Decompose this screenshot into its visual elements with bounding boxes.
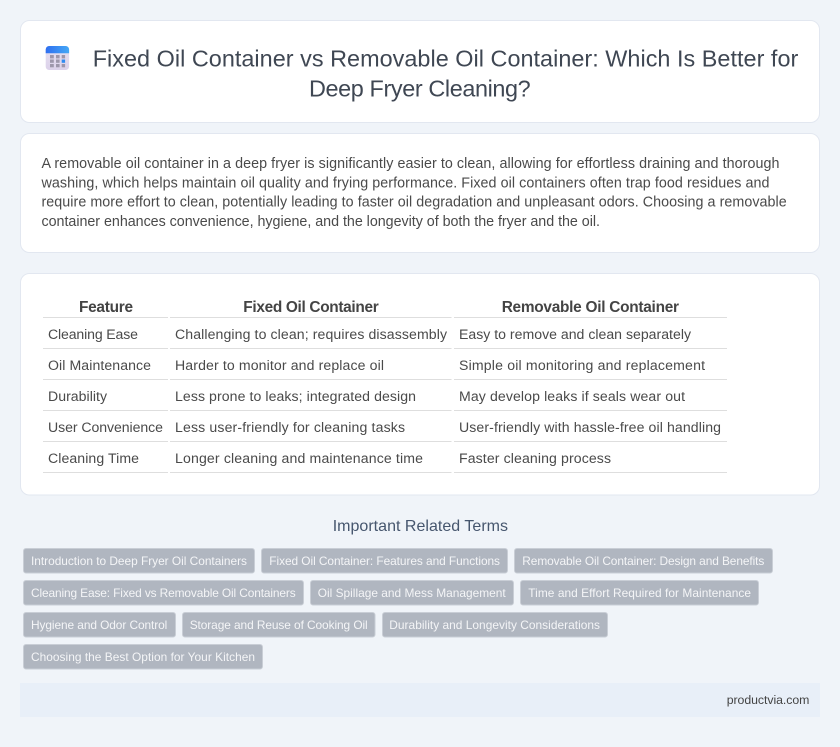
row: cleaning time: Cleaning Time [48,450,139,466]
summary text [40,156,787,230]
tag: choosing [24,644,262,669]
tag: durability: Durability and Longevity Considerations [389,618,600,632]
summary text: A removable oil container in a deep fryer is significantly easier to clean, allowing for effortless draining and thorough [42,156,780,172]
tag: introduction [24,548,254,573]
tag: durability [382,612,608,637]
panel: summary card [20,134,820,252]
row: durability: May develop leaks if seals wear out [459,388,685,404]
row: oil maintenance: Oil Maintenance [48,357,151,373]
summary text: require more effort to clean, potentially leading to faster oil degradation and unpleasant odors. Choosing a removable [42,195,787,211]
tag: introduction: Introduction to Deep Fryer Oil Containers [31,554,247,568]
tag: removable container: Removable Oil Container: Design and Benefits [522,554,764,568]
tag: storage [182,612,375,637]
table header: Fixed Oil Container [243,299,379,316]
tag: removable container [514,548,772,573]
tag: cleaning ease: Cleaning Ease: Fixed vs Removable Oil Containers [31,586,296,600]
panel: title card [20,20,820,122]
tag: time and effort [520,580,758,605]
title: Fixed Oil Container vs Removable Oil Container: Which Is Better for [93,46,799,72]
row: cleaning ease [48,326,692,342]
tag: cleaning ease [24,580,304,605]
footer bar [20,683,820,717]
row: user convenience: User Convenience [48,419,163,435]
table header [79,299,679,316]
row: oil maintenance: Simple oil monitoring and replacement [459,357,705,373]
row: durability [48,388,685,404]
row: durability: Less prone to leaks; integrated design [175,388,416,404]
row: user convenience: User-friendly with hassle-free oil handling [459,419,721,435]
tag: oil spillage [310,580,514,605]
table header: Removable Oil Container [502,299,679,316]
tag: time and effort: Time and Effort Required for Maintenance [528,586,751,600]
row: user convenience [48,419,721,435]
tag: fixed container [262,548,508,573]
panel: related term tags [24,548,772,669]
row: durability: Durability [48,388,108,404]
footer text: site name: productvia.com [727,693,809,707]
row: cleaning ease: Challenging to clean; requires disassembly [175,326,448,342]
row: oil maintenance [48,357,705,373]
title [93,46,799,102]
row: oil maintenance: Harder to monitor and replace oil [175,357,384,373]
row: cleaning time: Faster cleaning process [459,450,611,466]
title: Deep Fryer Cleaning? [309,76,531,102]
tag: oil spillage: Oil Spillage and Mess Management [318,586,506,600]
summary text: washing, which helps maintain oil quality and frying performance. Fixed oil containers often trap food residues and [40,175,770,191]
panel: comparison table [20,274,820,495]
tag: hygiene: Hygiene and Odor Control [31,618,167,632]
table header: Feature [79,299,133,316]
tag: choosing: Choosing the Best Option for Your Kitchen [31,650,255,664]
summary text: container enhances convenience, hygiene, and the longevity of both the fryer and the oil. [42,214,600,230]
row: user convenience: Less user-friendly for cleaning tasks [175,419,405,435]
row: cleaning time: Longer cleaning and maintenance time [175,450,423,466]
icon: calendar [46,46,69,70]
tag: hygiene [24,612,176,637]
tag: storage: Storage and Reuse of Cooking Oil [190,618,368,632]
row: cleaning ease: Easy to remove and clean separately [459,326,692,342]
heading: important related terms: Important Related Terms [333,518,508,535]
tag: fixed container: Fixed Oil Container: Features and Functions [269,554,500,568]
row: cleaning time [48,450,611,466]
row: cleaning ease: Cleaning Ease [48,326,138,342]
